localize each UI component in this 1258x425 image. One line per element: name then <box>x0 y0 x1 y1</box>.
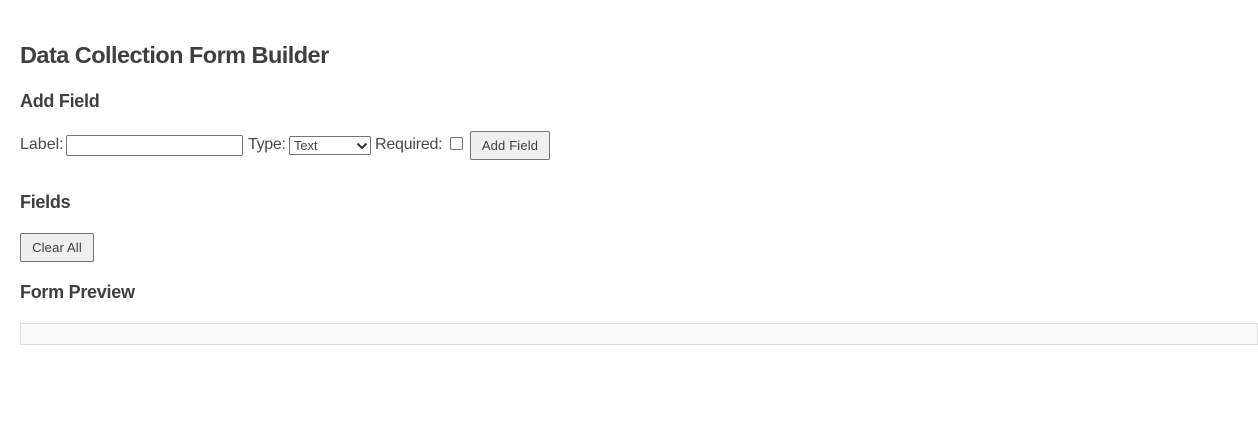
type select dropdown <box>289 136 371 155</box>
heading: form preview: Form Preview <box>20 282 135 302</box>
required checkbox <box>450 137 463 150</box>
select value: Text <box>294 138 317 153</box>
add field form row <box>20 131 550 160</box>
form preview panel <box>20 323 1258 345</box>
icon: chevron <box>356 142 368 150</box>
type caption: Type: <box>248 136 286 153</box>
clear all button: Clear All <box>32 240 82 255</box>
heading: fields: Fields <box>20 192 70 212</box>
title: Data Collection Form Builder <box>20 42 329 68</box>
heading: add field: Add Field <box>20 91 99 111</box>
clear all button <box>20 233 94 262</box>
add field button <box>470 131 550 160</box>
required caption: Required: <box>375 136 442 153</box>
label text input <box>66 135 243 156</box>
label caption: Label: <box>20 136 64 153</box>
add field button: Add Field <box>482 138 538 153</box>
